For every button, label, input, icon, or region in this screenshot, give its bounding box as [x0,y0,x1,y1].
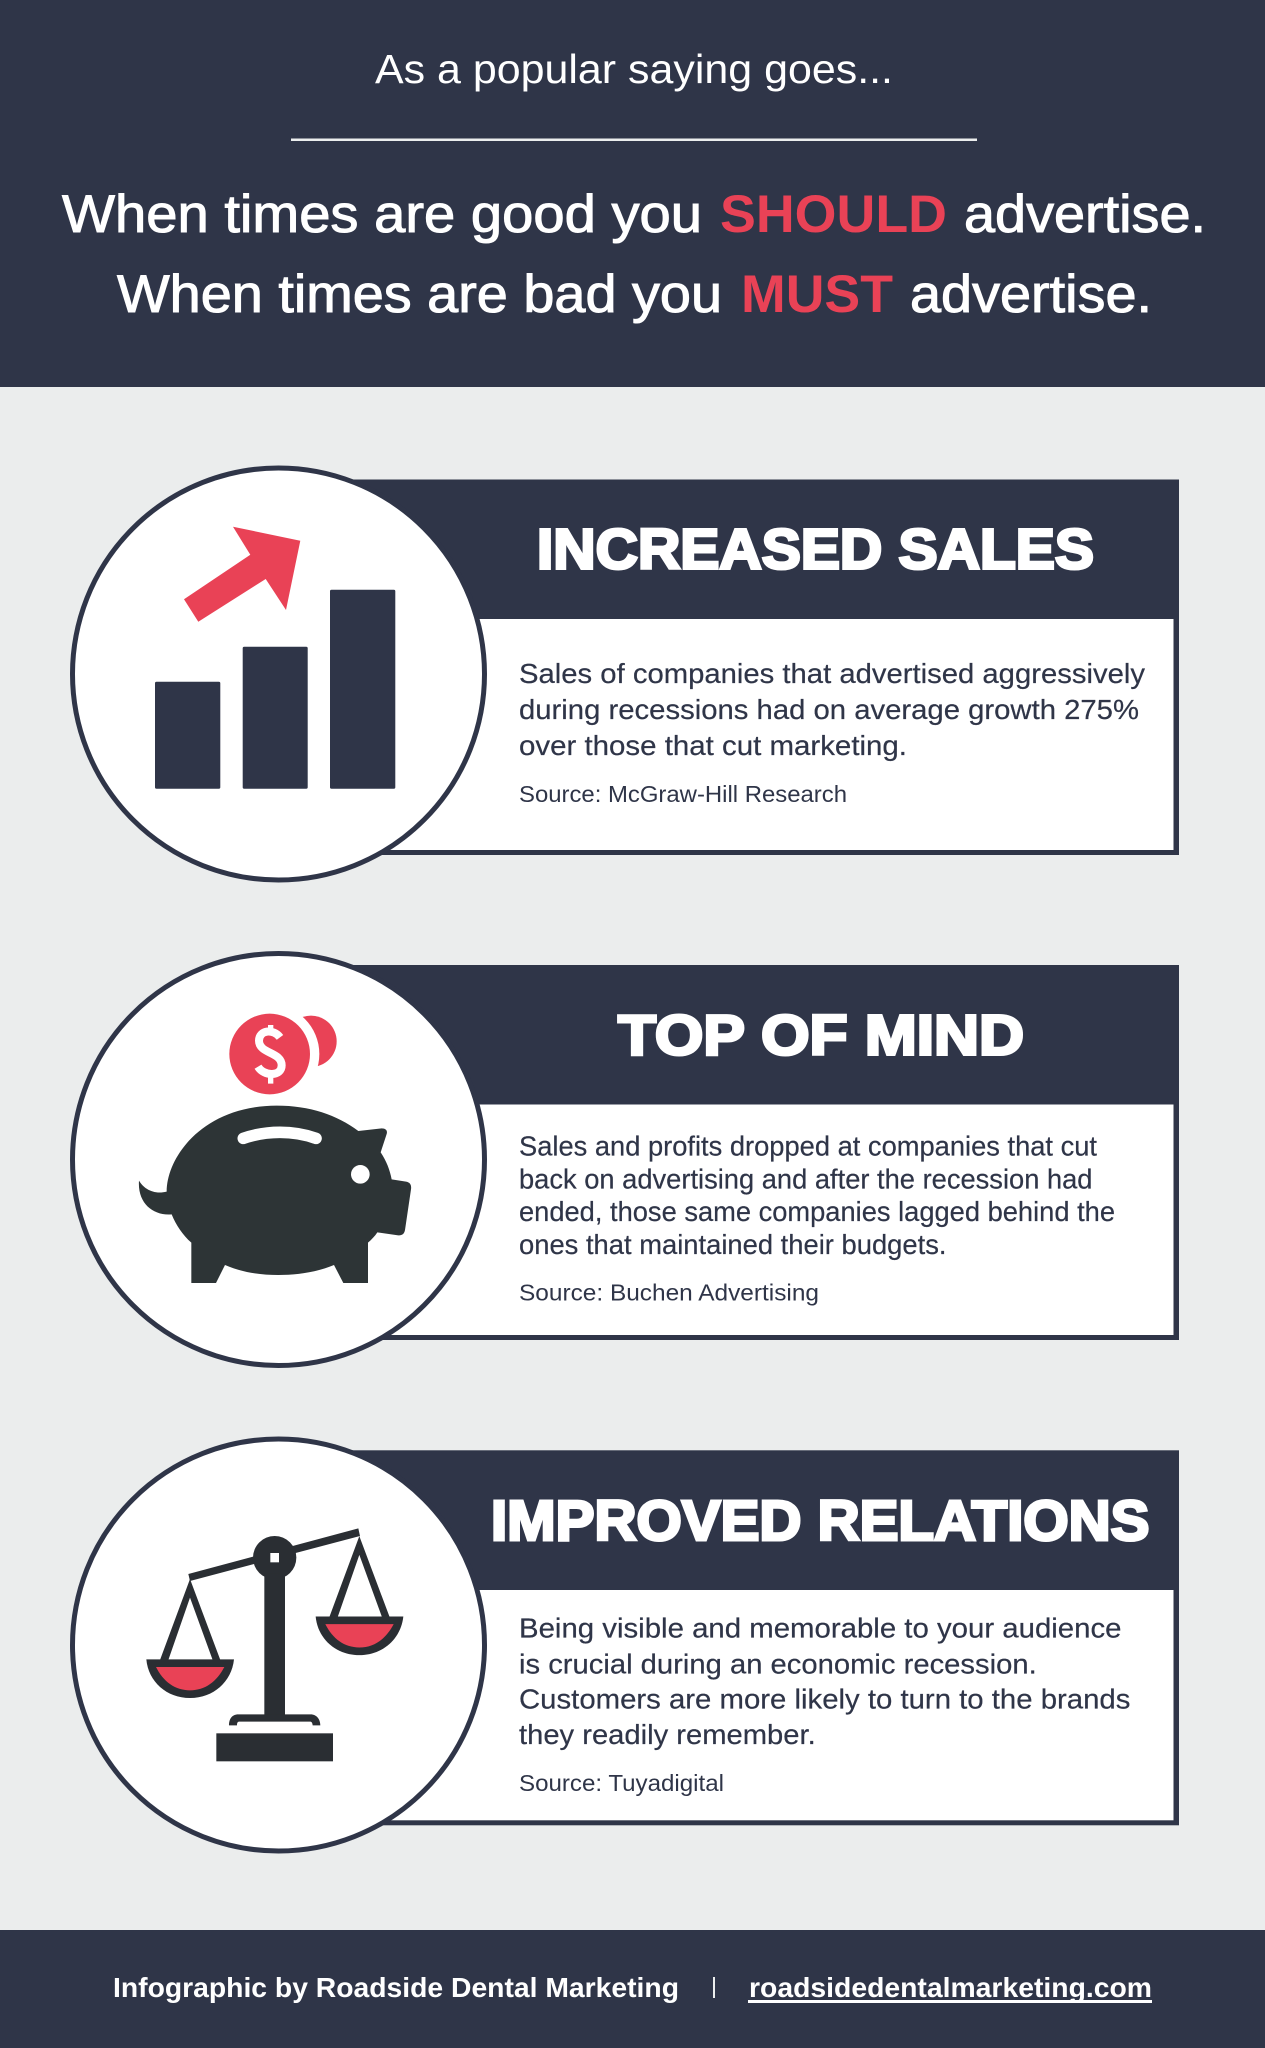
source: Source: McGraw-Hill Research [519,781,847,807]
body text: Customers are more likely to turn to the brands [519,1683,1130,1714]
headline line two: advertise. [910,265,1152,324]
headline line two: When times are bad you [117,265,722,324]
header banner [0,0,1265,387]
body text [519,658,1145,761]
headline line one [62,185,1206,244]
headline line two: MUST [741,265,893,324]
footer credit: Infographic by Roadside Dental Marketing [113,1972,679,2003]
footer [0,1930,1265,2048]
body text: over those that cut marketing. [519,730,907,761]
body text: ones that maintained their budgets. [519,1229,946,1260]
panel: top of mind [270,965,1179,1340]
body text: Sales and profits dropped at companies that cut [519,1131,1097,1162]
source: Source: Tuyadigital [519,1770,724,1796]
heading: improved relations: IMPROVED RELATIONS [491,1489,1150,1553]
heading: top of mind: TOP OF MIND [618,1004,1024,1068]
heading: increased sales: INCREASED SALES [537,518,1094,582]
headline line one: When times are good you [62,185,702,244]
body text: Sales of companies that advertised aggressively [519,658,1145,689]
icon circle: balance scale [72,1439,484,1851]
body text: ended, those same companies lagged behind the [519,1196,1115,1227]
icon circle: piggy bank [72,954,484,1366]
body text: back on advertising and after the recession had [519,1163,1092,1194]
body text [519,1131,1115,1260]
icon: coins [220,1004,337,1104]
body text: during recessions had on average growth 275% [519,694,1139,725]
icon: pig [139,1106,411,1283]
body text [519,1613,1130,1750]
intro line: As a popular saying goes... [375,46,893,92]
icon: up arrow [184,527,300,622]
body text: they readily remember. [519,1719,816,1750]
headline line one: advertise. [964,185,1206,244]
icon: right pan [316,1536,403,1655]
icon: left pan [146,1579,234,1698]
panel: increased sales [270,480,1179,855]
source: Source: Buchen Advertising [519,1280,819,1306]
panel: improved relations [270,1450,1179,1825]
body text: Being visible and memorable to your audience [519,1613,1122,1644]
bar chart [155,590,395,789]
headline line two [117,265,1152,324]
icon circle: rising bar chart [72,468,484,880]
body text: is crucial during an economic recession. [519,1648,1037,1679]
icon: scale stand [188,1528,360,1761]
headline line one: SHOULD [720,185,947,244]
footer url: roadsidedentalmarketing.com [749,1972,1152,2003]
